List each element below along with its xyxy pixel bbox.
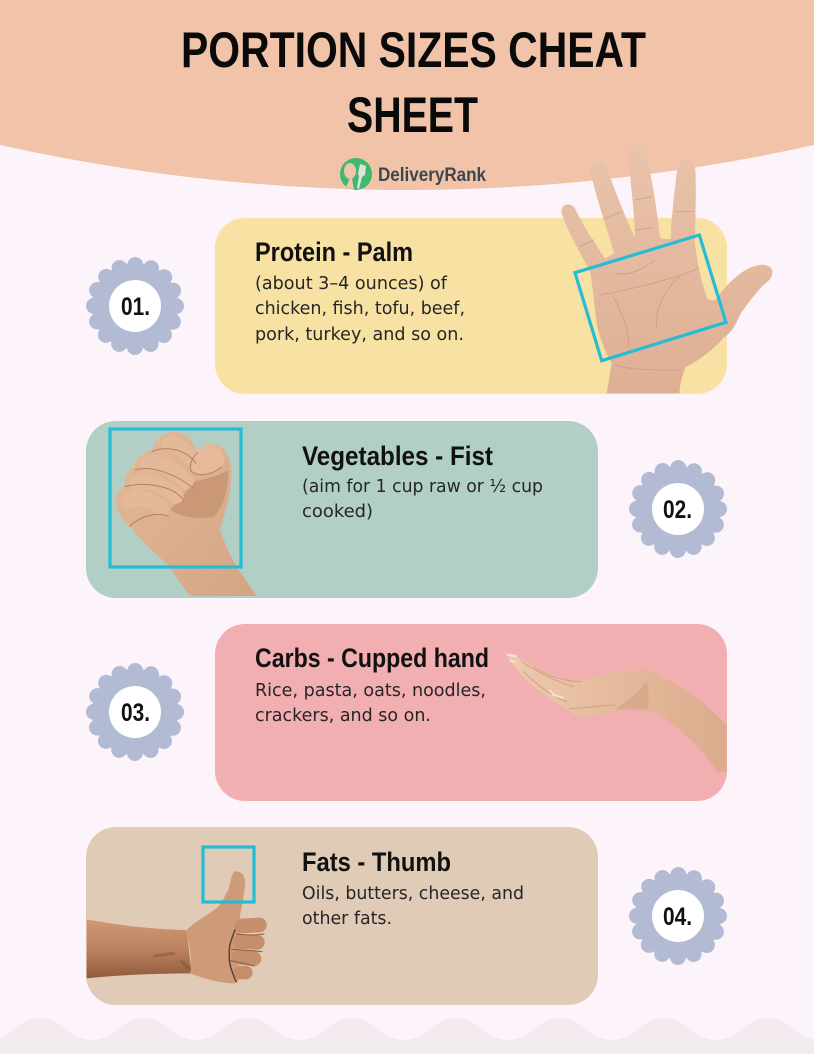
badge: 04 bbox=[635, 873, 721, 959]
title: SHEET bbox=[347, 87, 478, 143]
logo: DeliveryRank bbox=[340, 158, 486, 190]
badge: 01: 01. bbox=[121, 293, 150, 321]
heading: vegetables: Vegetables - Fist bbox=[302, 441, 493, 471]
badge: 03: 03. bbox=[121, 699, 150, 727]
highlight box: palm bbox=[575, 235, 726, 361]
text: protein description: (about 3–4 ounces) of bbox=[255, 273, 448, 294]
badge: 02 bbox=[635, 466, 721, 552]
footer wave bbox=[0, 1018, 814, 1054]
header banner bbox=[0, 0, 814, 190]
text: protein description bbox=[255, 273, 465, 345]
text: vegetables description: cooked) bbox=[302, 501, 373, 522]
text: fats description bbox=[302, 883, 524, 929]
icon: cupped hand bbox=[507, 653, 727, 772]
text: protein description: pork, turkey, and so on. bbox=[255, 324, 464, 345]
panel: fats bbox=[86, 827, 598, 1005]
text: carbs description bbox=[255, 680, 486, 726]
panel: protein bbox=[215, 145, 772, 394]
text: vegetables description bbox=[302, 476, 543, 522]
highlight box: fist bbox=[110, 429, 241, 567]
icon: fist bbox=[116, 432, 257, 596]
text: vegetables description: (aim for 1 cup raw or ½ cup bbox=[302, 476, 543, 497]
text: carbs description: Rice, pasta, oats, noodles, bbox=[255, 680, 486, 701]
panel: carbs bbox=[215, 624, 727, 801]
text: protein description: chicken, fish, tofu, beef, bbox=[255, 298, 465, 319]
highlight box: thumb bbox=[203, 847, 254, 902]
title bbox=[181, 22, 646, 143]
icon: open palm bbox=[561, 145, 772, 393]
heading: carbs: Carbs - Cupped hand bbox=[255, 643, 489, 673]
badge: 02: 02. bbox=[663, 496, 692, 524]
logo wordmark: DeliveryRank bbox=[378, 165, 486, 186]
text: carbs description: crackers, and so on. bbox=[255, 705, 431, 726]
badge: 04: 04. bbox=[663, 903, 692, 931]
heading: protein: Protein - Palm bbox=[255, 237, 413, 267]
badge: 01 bbox=[92, 263, 178, 349]
title: PORTION SIZES CHEAT bbox=[181, 22, 646, 78]
text: fats description: other fats. bbox=[302, 908, 392, 929]
badge: 03 bbox=[92, 669, 178, 755]
text: fats description: Oils, butters, cheese, and bbox=[302, 883, 524, 904]
icon: fork and spoon bbox=[340, 158, 372, 190]
panel: vegetables bbox=[86, 421, 598, 598]
icon: thumbs up bbox=[87, 871, 264, 983]
heading: fats: Fats - Thumb bbox=[302, 847, 451, 877]
